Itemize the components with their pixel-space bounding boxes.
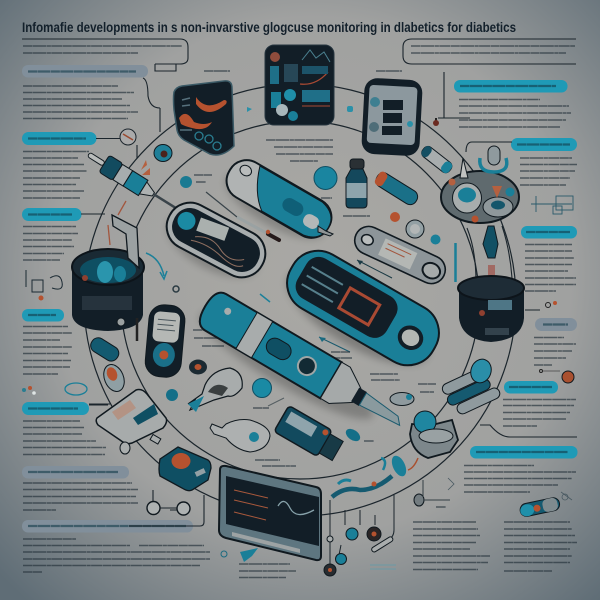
icon: teal circle badge [314,166,337,198]
panel: top left intro [22,39,188,71]
icon: left small device sketch [26,270,62,300]
screen: top center dashboard [265,45,334,125]
device: handheld meter [144,304,186,378]
arrow: curved teal [146,253,270,302]
diagram: bottom nodes [324,495,396,576]
device: thin lancet [206,192,279,240]
panel: top right intro [403,39,576,64]
device: L-shaped holder [108,201,139,268]
device: teal pen top [216,153,338,252]
device: teal capsule and red capsule [88,335,128,395]
icon: lens callout [120,129,136,145]
panel: left section 4 [22,309,72,374]
panel: right section 2 [511,138,577,185]
device: small pod [390,392,414,406]
device: triple capsules [441,356,502,418]
panel: right section 3 [521,226,577,291]
icon: left tiny molecules [22,383,87,395]
icon: capsule [373,170,420,207]
panel: right section 1 [454,80,571,127]
syringe [84,146,187,221]
icon: red probe [433,118,439,126]
device: small teal bean [344,426,374,444]
icon: vial [420,144,454,175]
device: teal box with orange window [159,447,211,491]
icon: small arrow markers [247,106,353,112]
connector lines [81,72,577,526]
arrow: pointer to meter [319,260,392,352]
device: clam case [410,411,458,458]
icon: small scanner [141,144,172,175]
panel: left section 2 [22,132,96,198]
device: multi-cup analyzer [441,158,519,223]
device: monitor stand [221,548,258,562]
device: teal nozzle tip [318,226,333,236]
icon: bottom clip [414,480,450,507]
panel: right section 4 [534,318,577,365]
screen: top left monitor [174,81,234,155]
icon: analyzer hook [480,146,507,172]
icon: small balls [390,212,456,282]
diagram: dual nodes bottom left [147,502,190,515]
icon: bottom faint schematics [448,478,572,500]
icon: bottom capsule [519,497,561,518]
icon: side schematic [531,196,573,214]
device: right canister [458,276,524,342]
device: oval glucose meter [156,195,273,291]
panel: left section 3 [22,208,82,260]
text: monitor captions [204,71,402,161]
device: wave sensor line [332,453,418,497]
connection rings [84,84,516,516]
icon: teal ball with label [180,175,212,188]
panel: right section 6 [464,446,578,492]
panel: left section 6 [22,466,138,510]
panel: left section 5 [22,402,106,454]
icon: medicine bottle [343,159,370,216]
icon: teal disc with label [252,378,284,408]
device: left canister [72,249,144,341]
device: large teal meter [272,240,450,384]
panel: left section 1 [22,65,148,118]
device: grey test strip holder [350,222,450,288]
device: connector below analyzer [467,226,512,282]
device: dark teal box sensor [274,406,345,464]
text: device annotations [193,330,436,392]
text: monitor caption [239,564,296,578]
device: large teal pen [190,288,412,448]
panel: right section 5 [503,381,576,426]
panel: left section 7 [22,520,210,572]
device: small round pods [166,360,207,401]
text: dial sensor caption [255,460,296,466]
text: bottom center column [413,522,490,570]
text: bottom right column [504,522,577,571]
device: white dial sensor [210,420,270,452]
device: wrench sensor [188,368,242,412]
device: portable reader [89,390,167,454]
device: bottom monitor [219,466,321,560]
screen: top right tablet [361,78,423,156]
icon: right small orange blob [540,301,574,383]
